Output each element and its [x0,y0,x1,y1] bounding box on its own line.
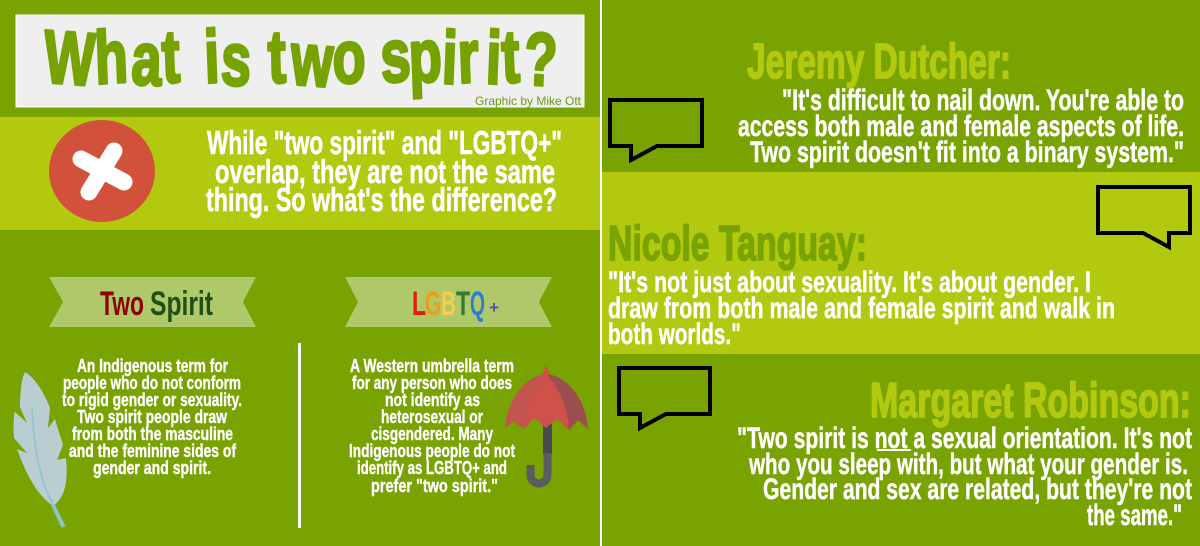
ribbon: lgbtq [345,277,552,327]
body: lgbtq: Indigenous people do not [349,441,515,461]
ribbon: lgbtq: B [441,285,456,323]
quote [738,84,1184,169]
body: lgbtq: A Western umbrella term [350,356,514,376]
ribbon: two spirit: Two [100,285,144,323]
name: Nicole Tanguay: [608,217,867,271]
divider [298,343,301,528]
body: lgbtq: not identify as [385,390,480,410]
icon: red x [49,120,155,222]
body: lgbtq: prefer "two spirit." [371,476,498,496]
body: two spirit: An Indigenous term for [77,356,228,376]
body: two spirit: people who do not conform [63,373,241,393]
credit: Graphic by Mike Ott [475,94,582,108]
body: lgbtq: for any person who does [352,373,512,393]
ribbon: two spirit: Spirit [150,285,213,323]
speech bubble [1098,187,1190,247]
column: two spirit [14,277,256,527]
icon: umbrella [505,365,588,484]
body: two spirit: and the feminine sides of [69,441,237,461]
body: two spirit: from both the masculine [72,424,233,444]
ribbon: lgbtq: + [489,298,499,317]
body: two spirit: to rigid gender or sexuality. [62,390,242,410]
band: intro [0,117,600,230]
quote [737,422,1192,532]
panel: quote jeremy dutcher [602,0,1200,172]
intro text: While "two spirit" and "LGBTQ+" [207,124,562,161]
intro text: thing. So what's the difference? [206,181,557,218]
body: lgbtq: heterosexual or [381,407,483,427]
panel: what is two spirit [0,0,600,546]
ribbon: lgbtq: G [425,285,441,323]
body: lgbtq [349,356,515,496]
ribbon: two spirit [49,277,256,327]
title: What is two spirit? [43,13,559,103]
body: lgbtq: cisgendered. Many [371,424,493,444]
body: two spirit: Two spirit people draw [77,407,228,427]
panel: quote margaret robinson [602,354,1200,546]
body: two spirit [62,356,242,478]
quote [608,266,1115,351]
body: lgbtq: identify as LGBTQ+ and [357,458,507,478]
ribbon: lgbtq: Q [470,285,485,323]
quote: both worlds." [608,318,741,351]
ribbon: lgbtq: T [456,285,470,323]
speech bubble [619,368,710,428]
speech bubble [610,100,702,160]
intro text: overlap, they are not the same [215,153,555,190]
title box [16,13,584,108]
body: two spirit: gender and spirit. [93,458,211,478]
ribbon: lgbtq: L [412,285,426,323]
icon: feather [14,372,67,527]
name: Jeremy Dutcher: [747,35,1011,89]
column: lgbtq [345,277,588,496]
panel: quote nicole tanguay [602,172,1200,354]
intro text [206,124,562,218]
